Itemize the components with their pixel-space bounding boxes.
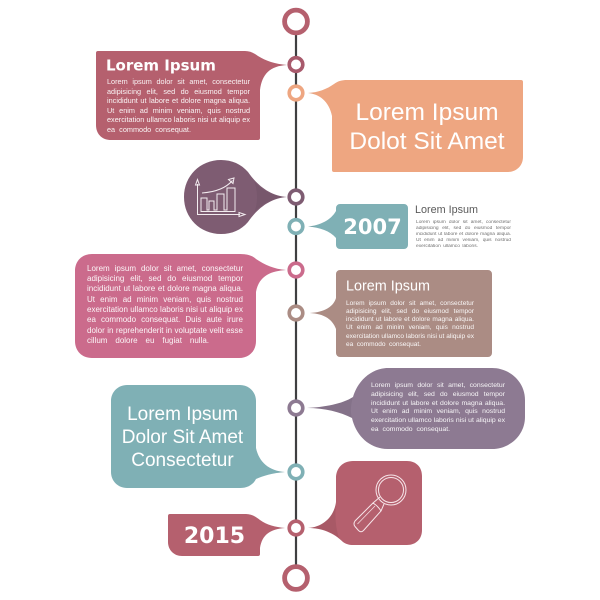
text block: red callout <box>107 77 250 137</box>
text block: brown callout <box>346 300 474 354</box>
text block: 2007 description: Lorem Ipsum <box>415 204 478 216</box>
text block: brown callout: Ut enim ad minim veniam, quis nostrud <box>346 324 474 331</box>
text block: pink callout <box>87 264 243 354</box>
text block: 2007 description: exercitation ullamco laboris. <box>416 244 478 249</box>
panel: teal 2007 callout <box>308 204 408 249</box>
text block: purple callout: adipisicing elit, sed do eiusmod tempor <box>371 391 505 398</box>
text block: pink callout: adipisicing elit, sed do eiusmod tempor <box>87 274 243 283</box>
text block: brown callout: ea commodo consequat. <box>346 341 421 348</box>
text block: red callout: adipisicing elit, sed do eiusmod tempor <box>107 86 250 96</box>
text block: purple callout: incididunt ut labore et dolore magna aliqua. <box>371 400 505 407</box>
text block: red callout: exercitation ullamco laboris nisi ut aliquip ex <box>107 115 250 124</box>
panel: orange title callout <box>308 80 523 172</box>
year label: 2007: 2007 <box>343 215 402 239</box>
panel: brown text callout <box>307 270 492 357</box>
panel: plum circle callout <box>184 160 287 234</box>
heading: teal callout: Lorem Ipsum <box>127 404 238 425</box>
text block: brown callout: Lorem ipsum dolor sit amet, consectetur <box>346 300 474 307</box>
heading: orange callout: Lorem Ipsum <box>356 99 498 126</box>
text block: brown callout: adipisicing elit, sed do eiusmod tempor <box>346 308 474 315</box>
top end node <box>285 10 307 33</box>
text block: pink callout: Ut enim ad minim veniam, quis nostrud <box>87 295 243 304</box>
timeline nodes <box>289 58 303 535</box>
text block: brown callout: exercitation ullamco laboris nisi ut aliquip ex <box>346 333 474 340</box>
text block: purple callout: Ut enim ad minim veniam, quis nostrud <box>371 408 505 415</box>
text block: 2007 description: Ut enim ad minim veniam, quis nostrud <box>416 238 511 243</box>
text block: purple callout: exercitation ullamco laboris nisi ut aliquip ex <box>371 417 505 424</box>
text block: 2007 description: incididunt ut labore et dolore magna aliqua. <box>416 232 511 237</box>
text block: pink callout: ea commodo consequat. Duis aute irure <box>87 315 243 324</box>
icon: growth chart <box>196 178 245 216</box>
panel: red text callout <box>96 51 287 140</box>
panel: red 2015 callout <box>168 514 285 556</box>
heading: brown callout: Lorem Ipsum <box>346 278 430 294</box>
text block: red callout: ea commodo consequat. <box>107 124 191 134</box>
panel: teal title callout: Dolor Sit Amet <box>122 427 244 448</box>
text block: purple callout: ea commodo consequat. <box>371 426 450 433</box>
panel: teal title callout <box>111 385 285 488</box>
timeline axis <box>295 30 297 570</box>
text block: red callout: incididunt ut labore et dolore magna aliqua. <box>107 96 250 105</box>
text block: pink callout: dolor in reprehenderit in voluptate velit esse <box>87 326 243 335</box>
panel: magnifier callout <box>308 461 422 545</box>
panel: orange title callout: Dolot Sit Amet <box>349 128 505 155</box>
bottom end node <box>285 567 307 589</box>
panel: purple text callout <box>307 368 525 449</box>
text block: red callout: Lorem ipsum dolor sit amet, consectetur <box>107 77 250 86</box>
text block: 2007 description: adipisicing elit, sed do eiusmod tempor <box>416 226 511 231</box>
text block: 2007 description <box>415 204 511 254</box>
text block: red callout: Ut enim ad minim veniam, quis nostrud <box>107 106 250 114</box>
icon: magnifying glass <box>354 475 406 532</box>
year label: 2015: 2015 <box>184 524 245 549</box>
text block: pink callout: Lorem ipsum dolor sit amet, consectetur <box>87 264 243 272</box>
heading: red callout: Lorem Ipsum <box>106 56 216 74</box>
text block: pink callout: cillum dolore eu fugiat nulla. <box>87 336 209 345</box>
panel: pink text callout <box>75 254 286 358</box>
text block: 2007 description: Lorem ipsum dolor sit amet, consectetur <box>416 220 511 224</box>
text block: pink callout: incididunt ut labore et dolore magna aliqua. <box>87 284 243 293</box>
text block: purple callout: Lorem ipsum dolor sit amet, consectetur <box>371 382 505 389</box>
text block: brown callout: incididunt ut labore et dolore magna aliqua. <box>346 316 474 323</box>
text block: pink callout: exercitation ullamco laboris nisi ut aliquip ex <box>87 305 243 314</box>
panel: teal title callout: Consectetur <box>131 450 234 471</box>
text block: purple callout <box>371 382 505 440</box>
